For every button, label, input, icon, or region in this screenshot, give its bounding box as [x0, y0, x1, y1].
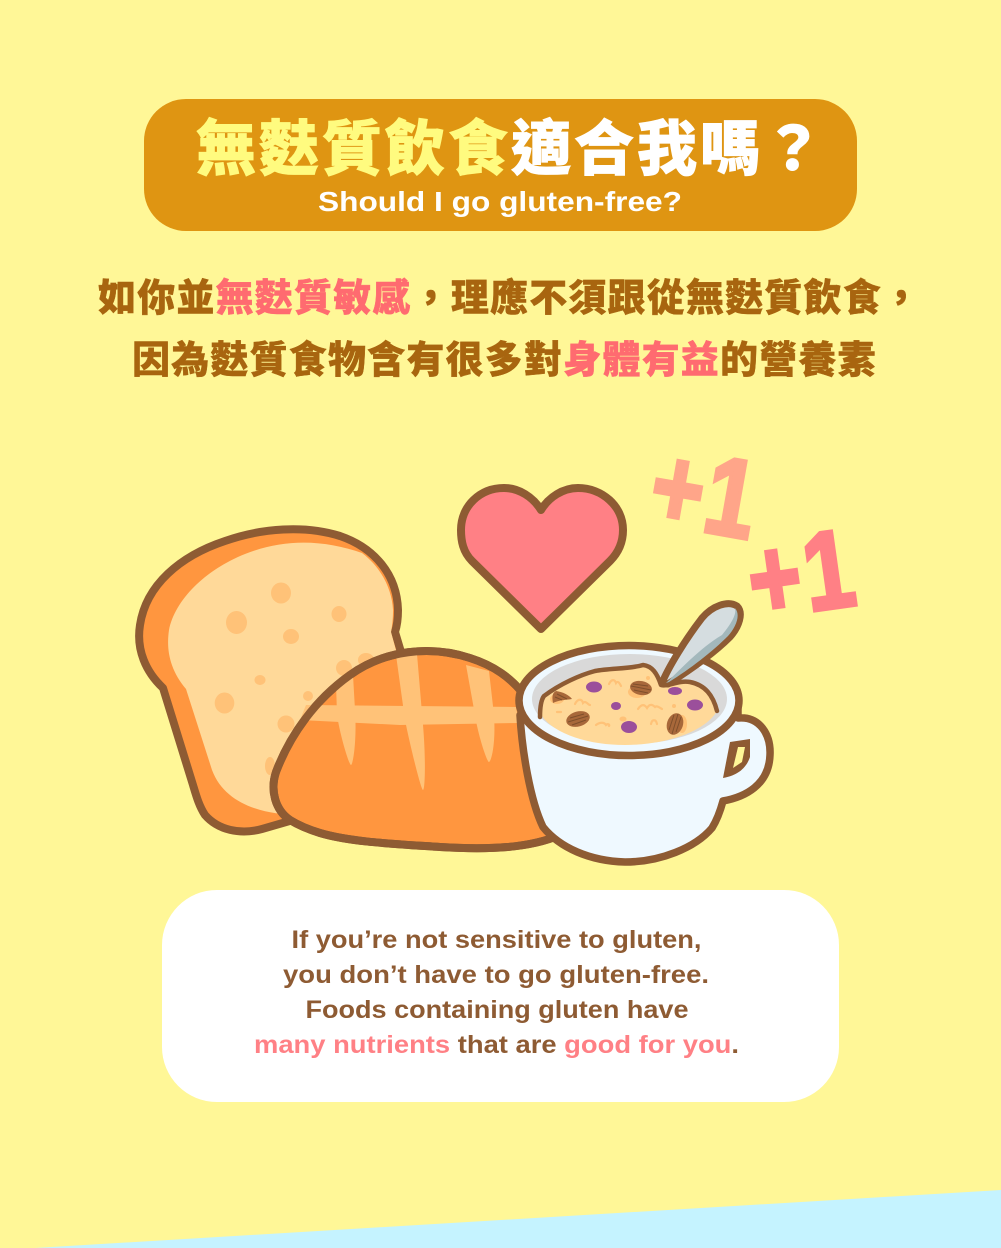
callout line 2: you don’t have to go gluten-free. [283, 961, 709, 989]
handle hole opening [733, 747, 745, 768]
subtitle: English heading: Should I go gluten-free? [318, 186, 682, 217]
icon: toast slice [139, 529, 407, 831]
spoon [662, 604, 740, 684]
almonds [552, 679, 686, 737]
icon: bread loaf [274, 651, 560, 848]
toast holes [215, 582, 374, 775]
oatmeal edge line [540, 665, 717, 717]
icon: oatmeal cup [519, 604, 770, 862]
title: Chinese heading: 無麩質飲食適合我嗎？ [196, 116, 826, 183]
intro line 1: 如你並無麩質敏感，理應不須跟從無麩質飲食， [98, 277, 921, 320]
callout line 4: many nutrients that are good for you . [254, 1031, 739, 1059]
cup inner [532, 654, 727, 744]
almond stripes [555, 684, 681, 734]
callout line 1: If you’re not sensitive to gluten, [292, 926, 702, 954]
loaf outline redraw [274, 651, 560, 848]
toast crumb face [168, 543, 402, 815]
bottom blue corner band [35, 1190, 1001, 1248]
icon: plus one, pink: +1 [740, 506, 865, 643]
title banner [144, 99, 857, 231]
spoon shadow [666, 608, 738, 683]
icon: plus one, peach: +1 [642, 424, 769, 563]
illustration: bread and oatmeal [139, 529, 770, 862]
cup rim [519, 646, 739, 756]
intro text block [98, 277, 921, 382]
handle hole [723, 739, 750, 778]
bread score marks [300, 654, 519, 790]
icon: heart [461, 488, 623, 629]
oatmeal surface [541, 666, 717, 745]
intro line 2: 因為麩質食物含有很多對身體有益的營養素 [132, 339, 877, 382]
callout: English summary [162, 890, 839, 1102]
oat flakes [557, 680, 662, 726]
callout line 3: Foods containing gluten have [306, 996, 689, 1024]
raisins [586, 682, 703, 733]
cup body and handle [520, 700, 770, 862]
oat bits [550, 676, 687, 733]
